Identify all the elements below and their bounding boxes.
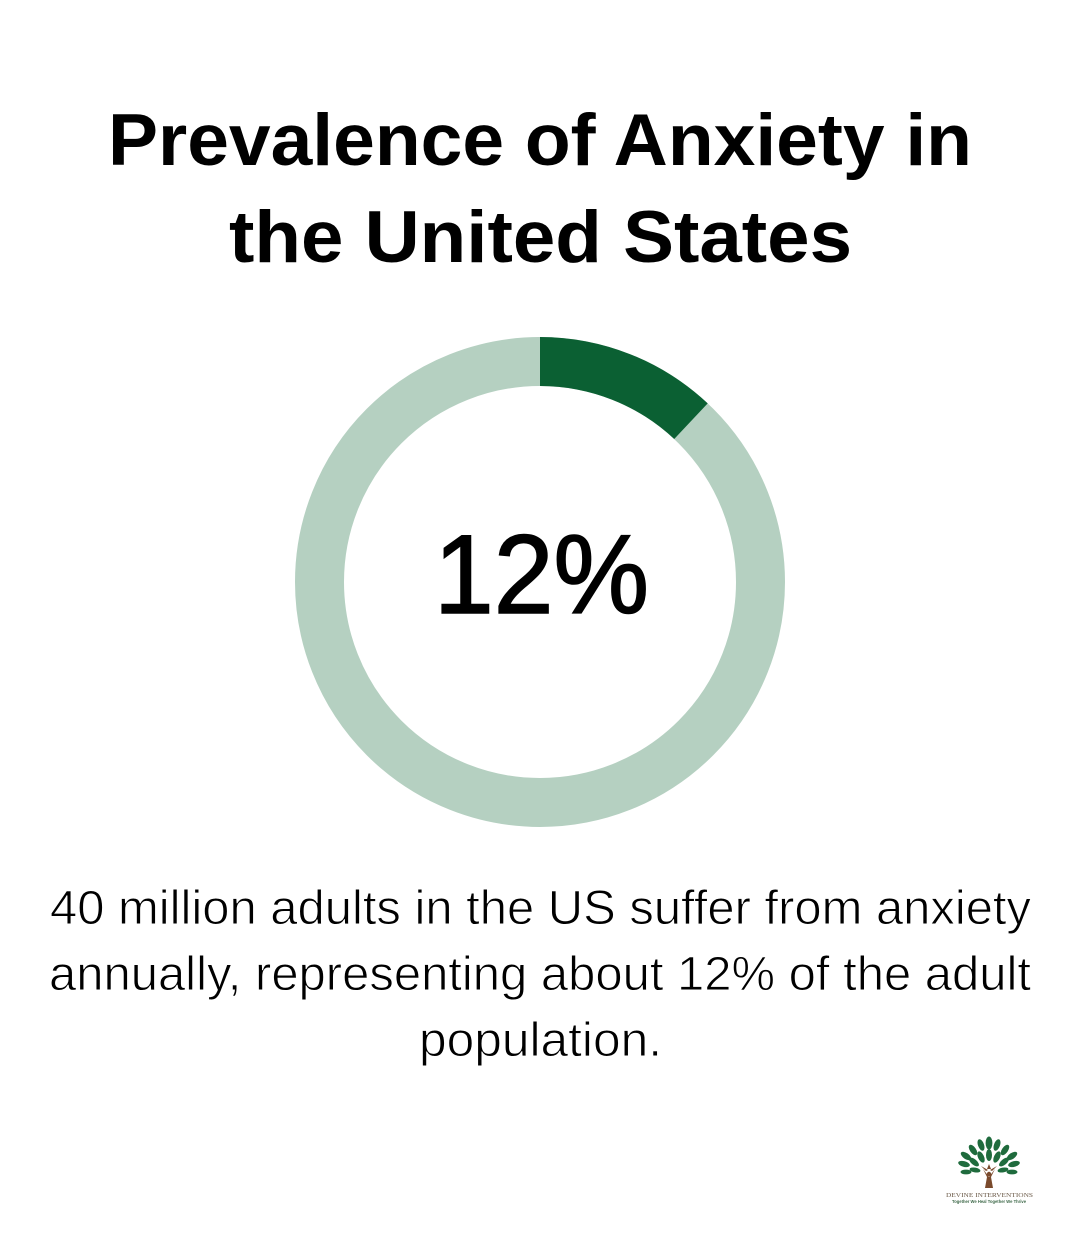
logo tagline: Together We Heal Together We Thrive (952, 1199, 1027, 1204)
title: Prevalence of Anxiety in (108, 100, 972, 181)
description text: population. (419, 1014, 662, 1067)
center value: 12% (434, 512, 649, 637)
logo name: DEVINE INTERVENTIONS (946, 1192, 1033, 1199)
logo: Devine Interventions (946, 1136, 1033, 1204)
description text: annually, representing about 12% of the adult (49, 948, 1031, 1001)
donut chart: 12% (320, 337, 760, 802)
icon: tree (957, 1136, 1021, 1188)
title (108, 100, 972, 278)
description text: 40 million adults in the US suffer from anxiety (50, 882, 1031, 935)
description text (49, 882, 1031, 1067)
title: the United States (229, 197, 852, 278)
